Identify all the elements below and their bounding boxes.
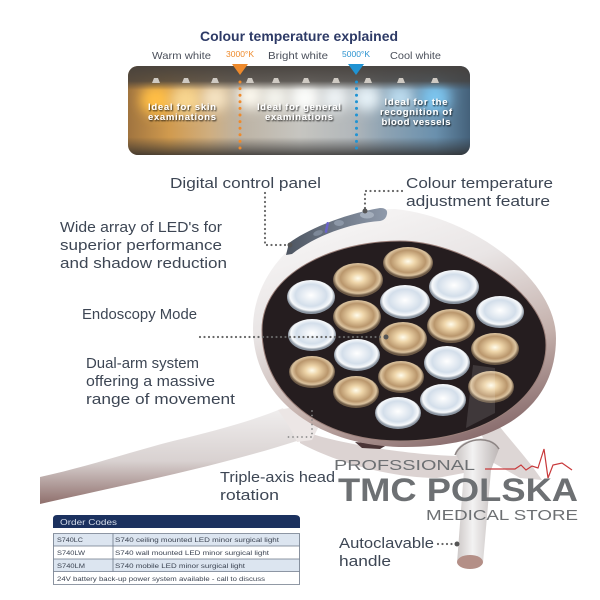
panel text: skin: examinations [148,112,216,123]
panel: colour temperature strip [128,66,470,155]
heartbeat line [485,449,572,478]
callout: dual-arm system [86,355,236,408]
callout: colour temperature adjustment [362,175,553,214]
control panel [286,208,387,255]
title: Colour temperature explained [200,29,398,44]
head rim [253,209,556,447]
table rows: S740LW [57,550,85,557]
watermark logo: PROFSSIONAL [334,457,475,474]
table heading: Order Codes [60,517,117,527]
callout: colour temperature adjustment: adjustment feature [406,193,550,210]
callout: wide array of LEDs [60,219,227,272]
callout: digital control panel [170,175,321,248]
table rows: S740 ceiling mounted LED minor surgical light [115,537,279,544]
panel text: blood vessels [380,97,453,128]
callout: triple-axis head rotation: rotation [220,487,279,504]
panel text: blood vessels: recognition of [380,107,453,118]
callout: autoclavable handle: handle [339,553,391,570]
table rows: S740 wall mounted LED minor surgical light [115,550,269,557]
label: cool white: Cool white [390,50,441,62]
callout: autoclavable handle: Autoclavable [339,535,434,552]
watermark logo: MEDICAL STORE [426,507,578,524]
panel text: blood vessels: blood vessels [382,117,450,128]
table rows: S740 mobile LED minor surgical light [115,563,245,570]
arm: left dual arm [40,408,300,504]
panel text: general: examinations [265,112,333,123]
arm: rear support [478,425,542,480]
callout: colour temperature adjustment: Colour temperature [406,175,553,192]
watermark logo [334,449,578,524]
label: warm white: Warm white [152,50,211,62]
order codes table [53,515,300,584]
LED recess [262,241,546,441]
callout: autoclavable handle [339,535,460,570]
callout: wide array of LEDs: and shadow reduction [60,255,227,272]
callout: dual-arm system: Dual-arm system [86,355,199,372]
panel text: general: Ideal for general [257,102,341,113]
callout: digital control panel: Digital control panel [170,175,321,192]
watermark logo: TMC POLSKA [338,472,578,508]
label: 5000K: 5000°K [342,49,370,59]
panel text: skin: Ideal for skin [148,102,216,113]
callout: endoscopy mode: Endoscopy Mode [82,306,197,323]
table rows [54,534,300,584]
callout: wide array of LEDs: Wide array of LED's for [60,219,222,236]
marker: 5000K [348,64,364,148]
handle [455,438,499,569]
panel text: blood vessels: Ideal for the [384,97,448,108]
LED array [287,247,524,429]
label: 3000K: 3000°K [226,49,254,59]
panel text: general [257,102,341,123]
panel text: skin [148,102,216,123]
callout: wide array of LEDs: superior performance [60,237,222,254]
callout: dual-arm system: range of movement [86,391,236,408]
callout: endoscopy mode [82,306,388,340]
label: bright white: Bright white [268,50,328,62]
lamp head [253,208,556,449]
marker: 3000K [232,64,248,148]
callout: dual-arm system: offering a massive [86,373,215,390]
callout: triple-axis head rotation: Triple-axis head [220,469,335,486]
table rows: S740LC [57,537,84,544]
table rows: 24V battery back-up power system available - call to discuss [57,576,265,583]
callout: triple-axis head rotation [220,411,335,504]
arm: yoke band [300,430,480,478]
table rows: S740LM [57,563,85,570]
